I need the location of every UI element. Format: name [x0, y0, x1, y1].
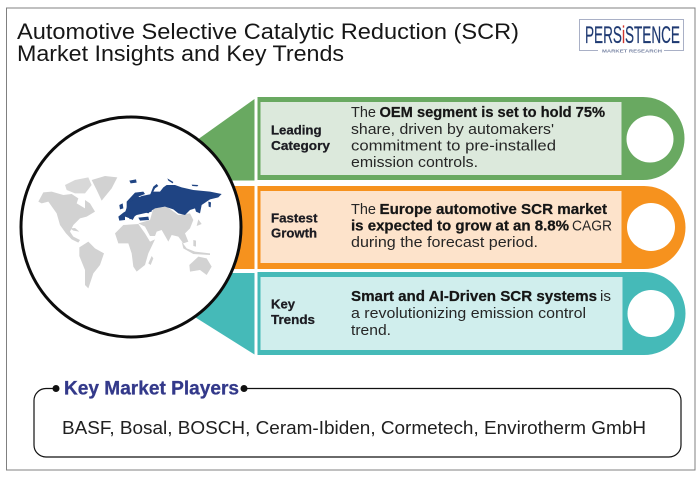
description: leading category	[351, 104, 605, 171]
label: leading category: Leading	[271, 122, 322, 138]
description: leading category: share, driven by automakers'	[351, 121, 554, 138]
description: key trends: a revolutionizing emission control	[351, 305, 586, 322]
panel: key market players	[34, 378, 681, 457]
title: Automotive Selective Catalytic Reduction (SCR)	[17, 19, 519, 44]
icon circle: green	[626, 116, 674, 162]
heading: Key Market Players	[64, 378, 239, 400]
wedge: teal	[190, 273, 254, 354]
band: teal	[258, 272, 686, 355]
title: Market Insights and Key Trends	[17, 41, 344, 66]
box outline	[34, 388, 681, 457]
description: key trends	[351, 288, 611, 339]
label: fastest growth	[271, 210, 318, 240]
description: fastest growth: during the forecast period.	[351, 234, 538, 251]
description: key trends: Smart and AI-Driven SCR systems	[351, 288, 597, 305]
description: fastest growth: The	[351, 201, 376, 218]
label: key trends: Key	[271, 296, 296, 312]
band: green	[258, 97, 684, 180]
panel: fastest growth	[225, 186, 686, 269]
label: key trends	[271, 296, 315, 327]
label: leading category	[271, 122, 331, 153]
description: leading category: OEM segment is set to hold 75%	[380, 104, 605, 121]
world map	[38, 176, 222, 288]
logo: Persistence Market Research	[580, 20, 684, 54]
icon circle: teal	[628, 290, 674, 337]
description: leading category: The	[351, 104, 376, 121]
title	[17, 19, 519, 66]
bullet right	[240, 385, 248, 392]
description: leading category: emission controls.	[351, 154, 478, 171]
wedge: orange	[225, 186, 254, 269]
bullet left	[52, 385, 60, 392]
text background: orange	[260, 191, 622, 263]
text background: teal	[260, 277, 622, 350]
description: key trends: trend.	[351, 322, 391, 339]
description: fastest growth: CAGR	[572, 218, 612, 234]
americas	[38, 176, 117, 288]
text background: green	[260, 102, 622, 175]
highlighted Europe and Russia	[118, 178, 222, 221]
players list: BASF, Bosal, BOSCH, Ceram-Ibiden, Cormetech, Envirotherm GmbH	[62, 418, 646, 438]
globe circle	[21, 117, 241, 337]
wedge: green	[190, 99, 254, 180]
band: orange	[258, 186, 686, 269]
icon circle: orange	[627, 203, 675, 251]
description: fastest growth: is expected to grow at an 8.8%	[351, 218, 569, 234]
label: leading category: Category	[271, 138, 331, 153]
description: fastest growth: Europe automotive SCR market	[380, 201, 607, 218]
africa, asia, oceania	[115, 207, 212, 275]
label: key trends: Trends	[271, 312, 315, 327]
label: fastest growth: Growth	[271, 226, 317, 240]
label: fastest growth: Fastest	[271, 210, 318, 226]
panel: leading category	[190, 97, 684, 180]
panel: key trends	[190, 272, 686, 355]
description: key trends: is	[600, 288, 611, 305]
logo: Persistence Market Research: MARKET RESEARCH	[602, 48, 663, 54]
description: leading category: commitment to pre-installed	[351, 138, 556, 154]
description: fastest growth	[351, 201, 612, 251]
